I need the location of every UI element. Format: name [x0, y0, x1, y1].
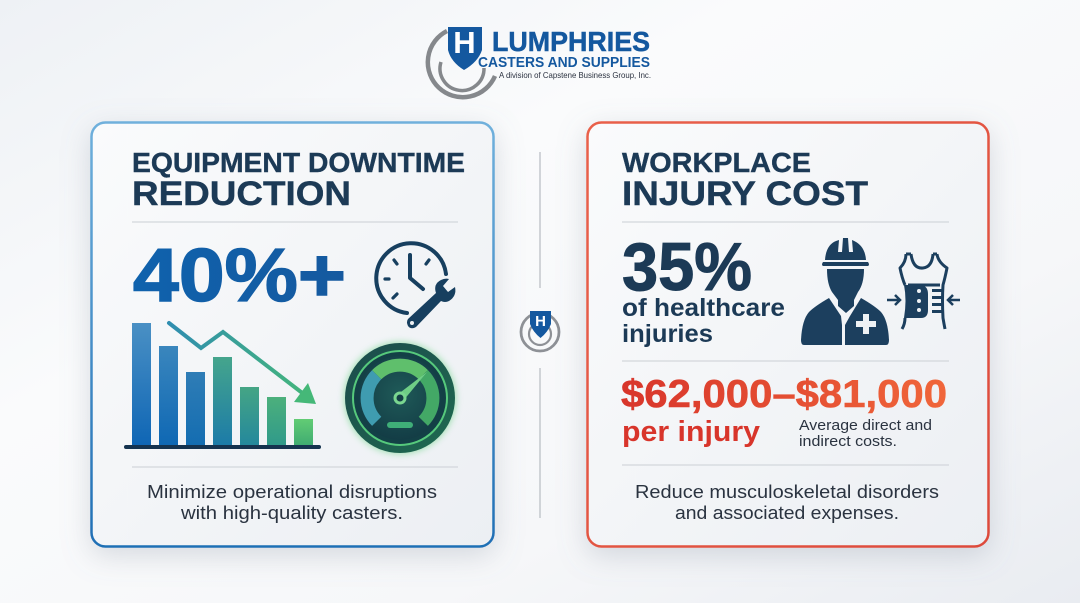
chart baseline	[124, 445, 321, 449]
caption: minimize disruptions: with high-quality casters.	[180, 503, 403, 523]
note: average costs: Average direct and	[799, 418, 932, 434]
panel: equipment downtime reduction	[92, 122, 494, 546]
icon: clock with wrench	[376, 243, 455, 328]
stat: cost range per injury: per injury	[622, 416, 760, 448]
heading: workplace injury cost: WORKPLACE	[622, 147, 811, 178]
note: average costs: indirect costs.	[799, 434, 897, 450]
caption: reduce disorders: Reduce musculoskeletal disorders	[635, 482, 939, 502]
caption: reduce disorders	[635, 482, 939, 523]
heading: workplace injury cost: INJURY COST	[622, 175, 868, 213]
stat: cost range per injury	[621, 373, 947, 448]
icon: small H shield	[521, 311, 559, 351]
bar chart with falling arrow	[124, 323, 321, 449]
logo division line: A division of Capstene Business Group, Inc.	[499, 70, 651, 80]
icon: speedometer gauge	[344, 342, 456, 454]
bars	[132, 323, 313, 445]
icon: small H shield: H	[535, 313, 546, 330]
heading: equipment downtime reduction	[132, 147, 465, 213]
logo shield	[448, 27, 482, 70]
heading: equipment downtime reduction: EQUIPMENT DOWNTIME	[132, 147, 465, 178]
stat: 40%+: 40%+	[133, 233, 346, 317]
icon: healthcare worker with hard hat	[801, 238, 889, 345]
icon: back support brace with compression arrows	[887, 254, 960, 329]
panel: workplace injury cost	[588, 122, 988, 546]
caption: minimize disruptions: Minimize operational disruptions	[147, 482, 437, 502]
logo name: LUMPHRIES	[492, 26, 650, 57]
heading: equipment downtime reduction: REDUCTION	[132, 175, 351, 213]
card background	[92, 122, 494, 546]
stat: 35% of healthcare injuries: injuries	[622, 320, 713, 348]
logo rings	[428, 31, 495, 97]
note: average costs	[799, 418, 932, 450]
downward arrow	[169, 323, 316, 404]
caption: reduce disorders: and associated expenses.	[675, 503, 899, 523]
stat: 35% of healthcare injuries: of healthcare	[622, 294, 785, 322]
stat: 35% of healthcare injuries: 35%	[622, 229, 752, 305]
logo subtitle: CASTERS AND SUPPLIES	[478, 54, 650, 71]
logo: Humphries Casters and Supplies	[428, 25, 651, 97]
card background	[588, 122, 988, 546]
logo H letter: H	[453, 25, 476, 60]
heading: workplace injury cost	[622, 147, 868, 213]
center divider with small logo	[521, 152, 559, 518]
caption: minimize disruptions	[147, 482, 437, 523]
stat: cost range per injury: $62,000–$81,000	[621, 373, 947, 416]
stat: 35% of healthcare injuries	[622, 229, 785, 348]
